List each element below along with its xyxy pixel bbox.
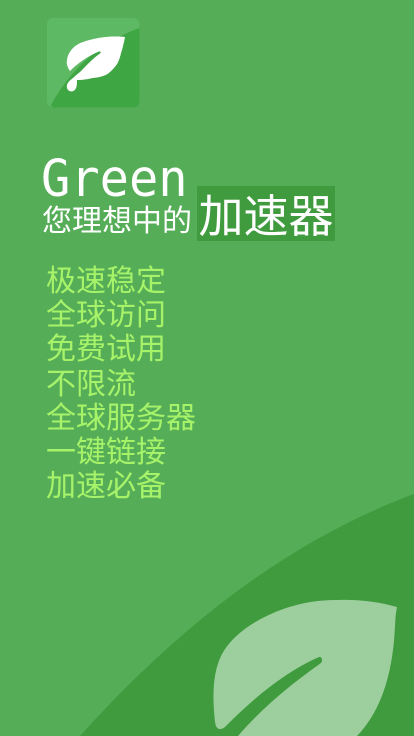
feature item 1: 极速稳定: [46, 256, 166, 300]
dark green curved panel: [80, 494, 414, 736]
feature item 4: 不限流: [46, 359, 136, 403]
feature item 3: 免费试用: [46, 324, 166, 368]
highlighted heading: 加速器: 加速器: [198, 180, 334, 245]
feature item 7: 加速必备: [46, 461, 166, 505]
feature item 6: 一键链接: [46, 427, 166, 471]
icon tile background: [47, 18, 140, 108]
icon: white leaf: [67, 37, 125, 91]
feature item 2: 全球访问: [46, 290, 166, 334]
title: Green: Green: [40, 150, 187, 209]
feature list: [46, 256, 196, 505]
icon: app logo: [47, 18, 140, 108]
icon tile dark fold: [51, 28, 140, 108]
icon: large faded leaf: [213, 600, 397, 736]
subtitle: 您理想中的: 您理想中的: [42, 196, 192, 240]
feature item 5: 全球服务器: [46, 393, 196, 437]
